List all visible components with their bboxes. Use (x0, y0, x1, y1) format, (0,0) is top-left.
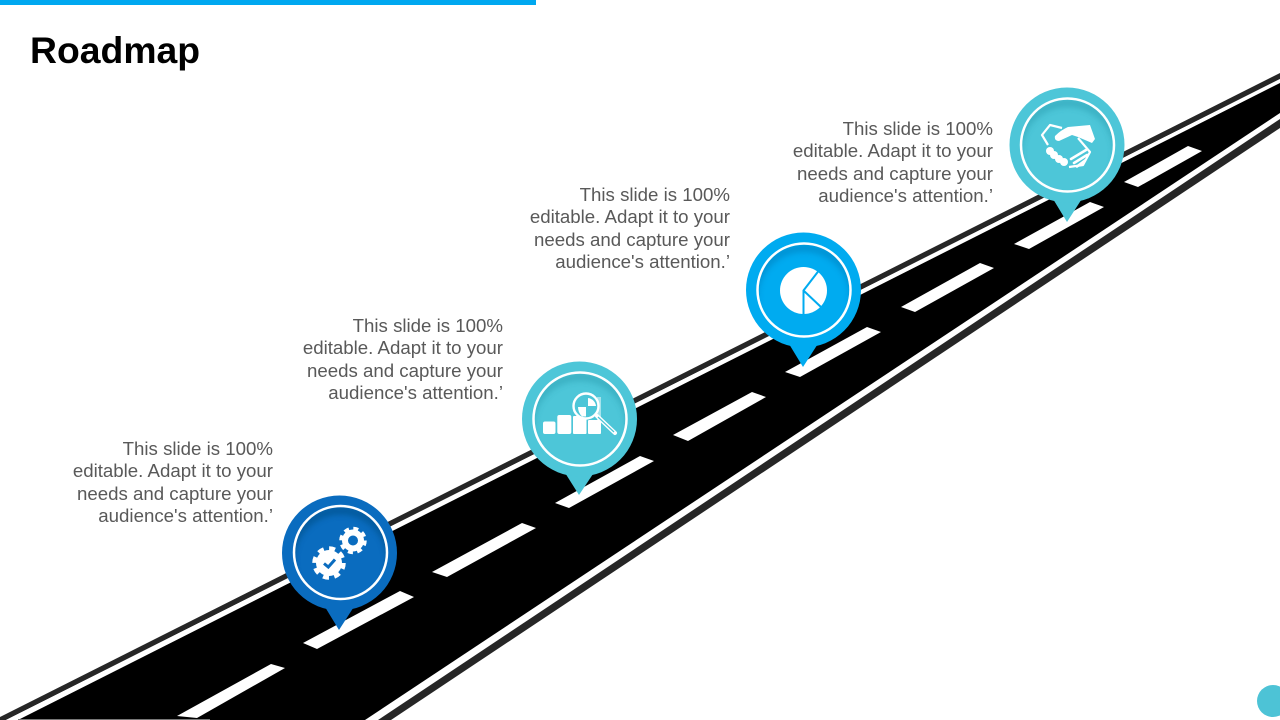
text block 4: editable. Adapt it to your (793, 140, 993, 161)
title: Roadmap (30, 29, 200, 71)
icon: gears (314, 528, 365, 578)
pin 3: pie chart icon (746, 232, 861, 367)
text block 2: audience's attention.’ (328, 382, 503, 403)
pin 1: gears icon (282, 496, 397, 630)
text block 2: This slide is 100% (353, 315, 503, 336)
icon: bars with magnifier (543, 394, 615, 434)
text block 1: audience's attention.’ (98, 505, 273, 526)
text block 4: needs and capture your (797, 163, 993, 184)
text block 1: needs and capture your (77, 483, 273, 504)
text block 4 (793, 118, 993, 206)
icon: handshake (1042, 125, 1095, 167)
text block 2: editable. Adapt it to your (303, 337, 503, 358)
text block 4: audience's attention.’ (818, 185, 993, 206)
text block 3: audience's attention.’ (555, 251, 730, 272)
pin 4: handshake icon (1010, 88, 1124, 222)
pin 2: bar chart and magnifier icon (522, 362, 637, 495)
corner dot (1257, 685, 1280, 717)
text block 4: This slide is 100% (843, 118, 993, 139)
text block 1 (73, 438, 273, 526)
text block 2 (303, 315, 503, 403)
text block 3 (530, 184, 730, 272)
lane dashes (177, 146, 1202, 718)
icon: pie chart (780, 267, 827, 314)
top accent bar (0, 0, 536, 5)
text block 3: editable. Adapt it to your (530, 206, 730, 227)
text block 3: needs and capture your (534, 229, 730, 250)
text block 3: This slide is 100% (580, 184, 730, 205)
text block 2: needs and capture your (307, 360, 503, 381)
text block 1: editable. Adapt it to your (73, 460, 273, 481)
text block 1: This slide is 100% (123, 438, 273, 459)
